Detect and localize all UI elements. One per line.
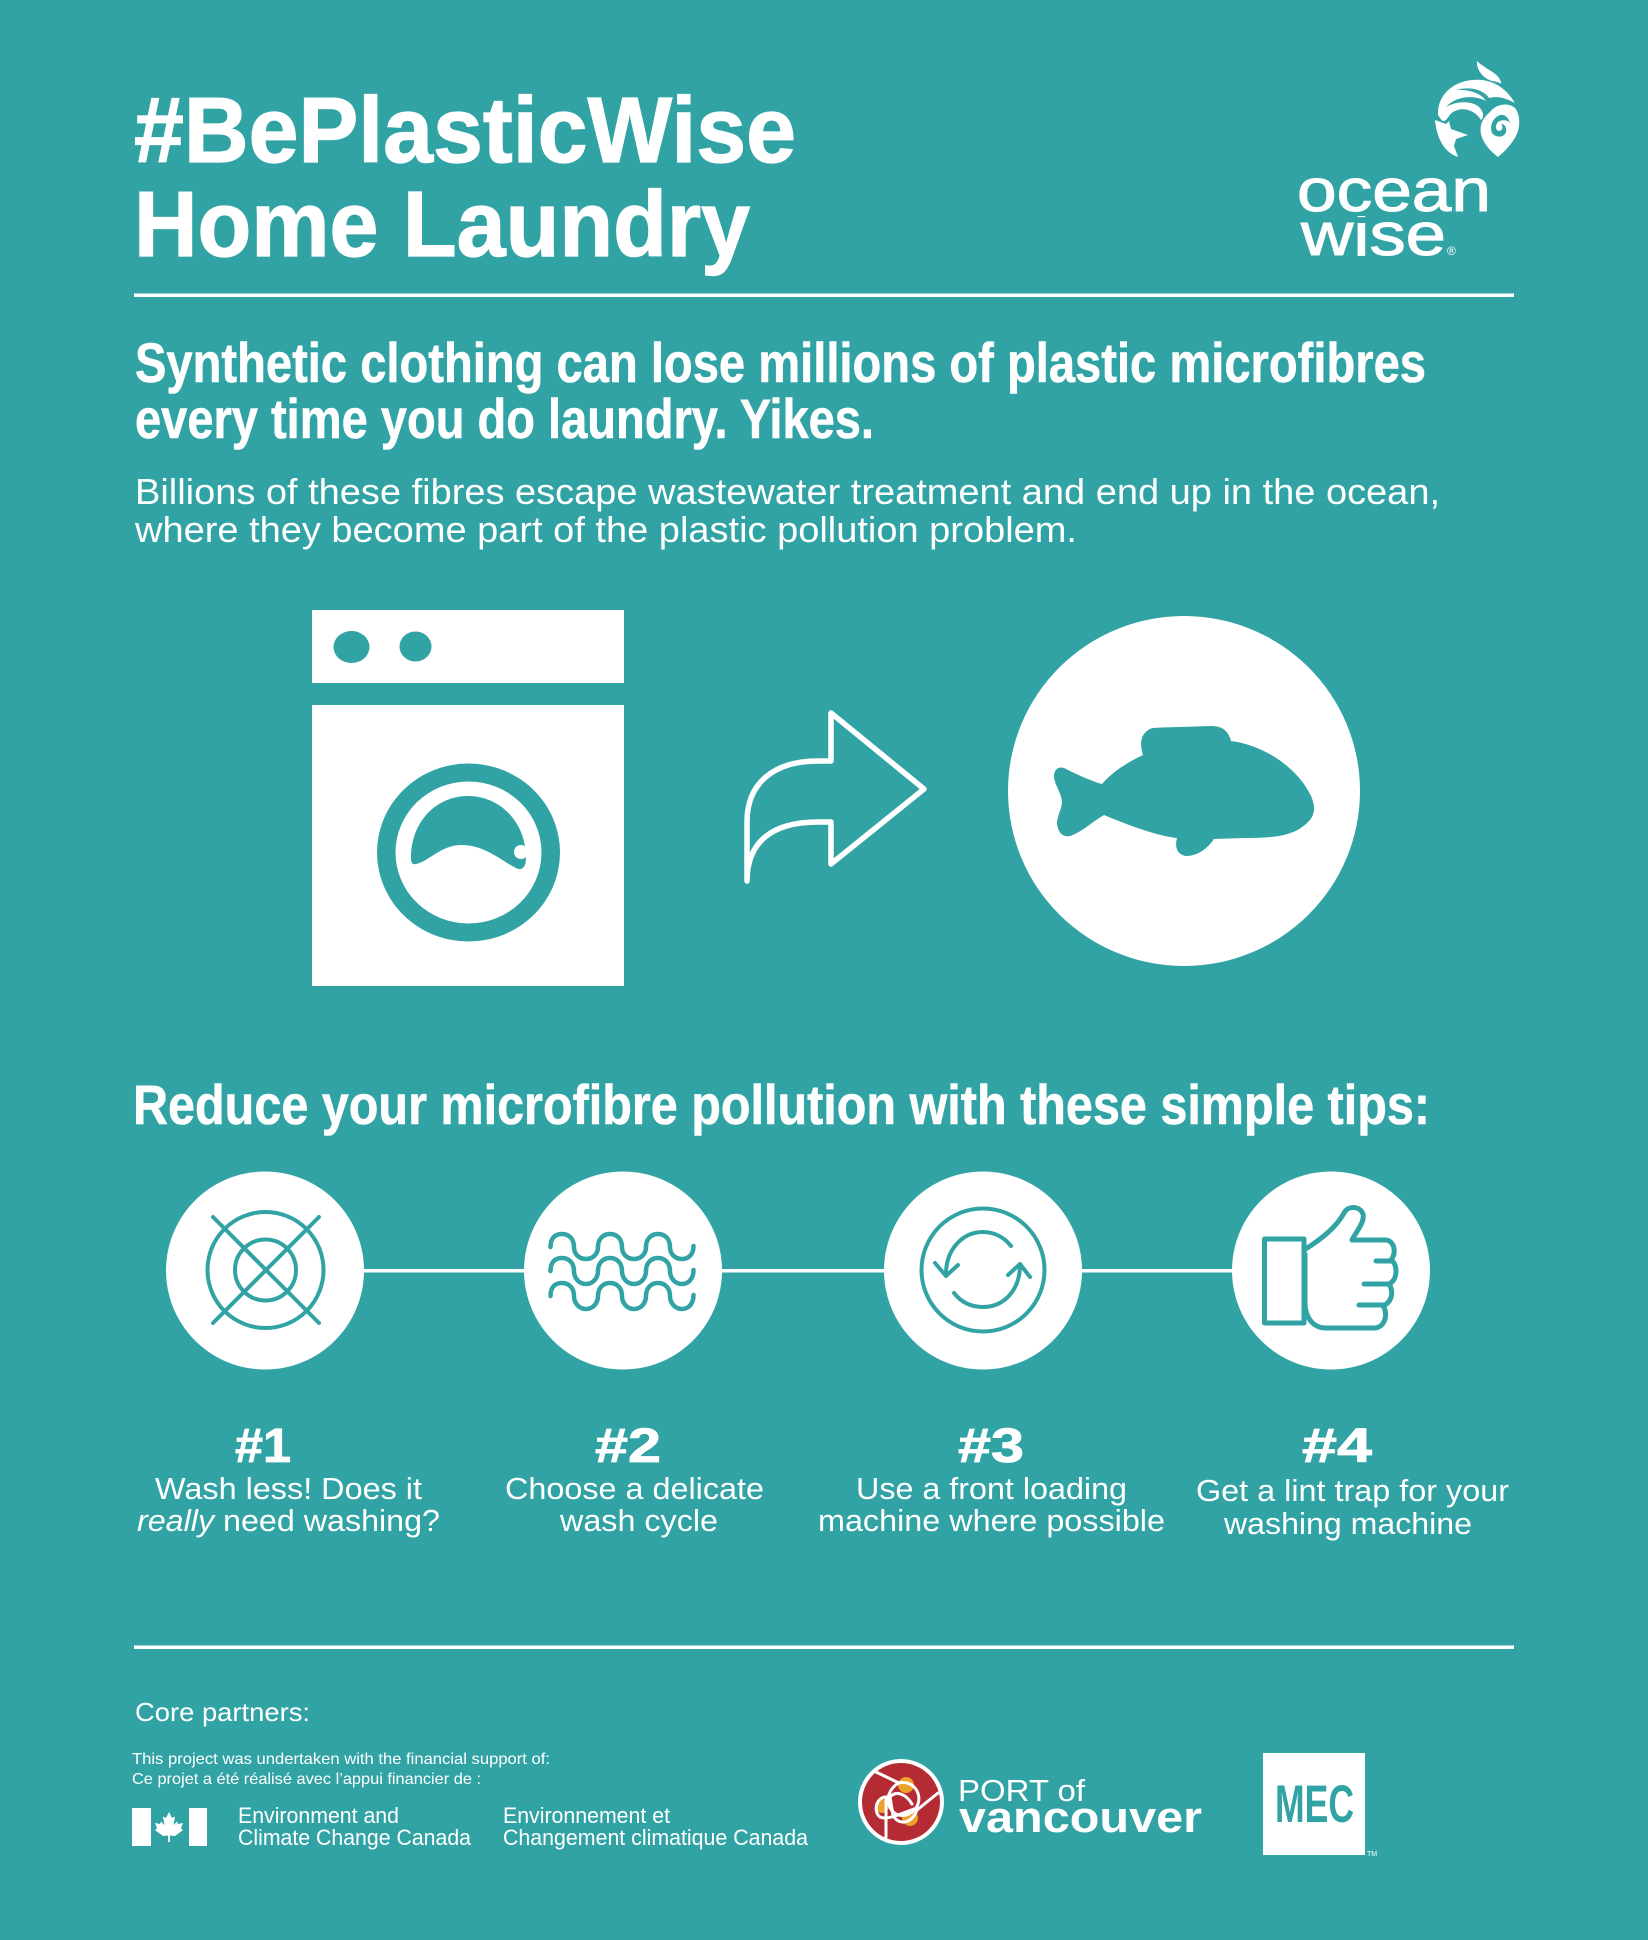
icon: front loading cycle [884,1172,1082,1370]
tip 4: Get a lint trap for your [1196,1474,1509,1508]
arrow [747,713,924,881]
text: Environnement et Changement climatique Canada: Changement climatique Canada [503,1825,808,1850]
tip 3: machine where possible [818,1504,1165,1538]
tip 1: Wash less! Does it [155,1472,423,1506]
icon: washing machine [312,610,624,986]
text: PORT of: PORT of [958,1773,1085,1808]
icon: do not wash [166,1172,364,1370]
divider [134,1646,1514,1649]
tip 4: #4 [1302,1420,1372,1473]
icon: thumbs up [1232,1172,1430,1370]
icon: Canadian flag [132,1808,207,1846]
title: Home Laundry [134,172,750,276]
tip 1 [137,1420,440,1538]
tip 3 [818,1420,1165,1538]
icon: port emblem [860,1761,942,1843]
tip 3: Use a front loading [856,1472,1127,1506]
icon: registered mark: ® [1447,244,1456,258]
tip 4: washing machine [1223,1507,1472,1541]
tip 1: #1 [235,1420,291,1473]
icon: waves [524,1172,722,1370]
body text [134,471,1440,550]
icon: Ocean Wise fish mark [1435,61,1519,157]
text: wise wordmark: wise [1300,201,1446,268]
headline: every time you do laundry. Yikes. [135,387,874,450]
body text: where they become part of the plastic pollution problem. [134,509,1077,550]
divider [134,294,1514,297]
tip 2: #2 [595,1420,661,1473]
text: Environment and Climate Change Canada [238,1803,471,1850]
tip 4 [1196,1420,1509,1541]
text: financial support note: This project was undertaken with the financial support of: [132,1751,550,1768]
text: financial support note: Ce projet a été réalisé avec l’appui financier de : [132,1771,481,1788]
tip 2: wash cycle [559,1504,718,1538]
text: core partners: Core partners: [135,1697,310,1727]
text: Environment and Climate Change Canada: Climate Change Canada [238,1825,471,1850]
headline: Synthetic clothing can lose millions of plastic microfibres [135,331,1426,394]
text: financial support note [132,1751,550,1788]
tip 3: #3 [958,1420,1024,1473]
tip 2 [505,1420,764,1538]
text: Environment and Climate Change Canada: Environment and [238,1803,399,1828]
icon: fish in circle [1008,616,1360,966]
text: vancouver: vancouver [959,1793,1202,1842]
logo: MEC [1263,1753,1377,1858]
body text: Billions of these fibres escape wastewater treatment and end up in the ocean, [135,471,1440,512]
tip 2: Choose a delicate [505,1472,764,1506]
title [134,78,796,276]
logo: MEC: TM [1367,1851,1377,1858]
headline [135,331,1426,450]
text: Environnement et Changement climatique Canada: Environnement et [503,1803,671,1828]
logo: Port of Vancouver [860,1761,1202,1843]
text: Environnement et Changement climatique Canada [503,1803,808,1850]
tip 1: really need washing? [137,1504,440,1538]
heading: tips: Reduce your microfibre pollution with these simple tips: [133,1073,1430,1136]
logo: Ocean Wise [1297,61,1519,268]
connector line [265,1269,1331,1272]
title: #BePlasticWise [134,78,796,182]
logo: MEC: MEC [1275,1775,1354,1834]
text: ocean wordmark: ocean [1297,157,1491,224]
